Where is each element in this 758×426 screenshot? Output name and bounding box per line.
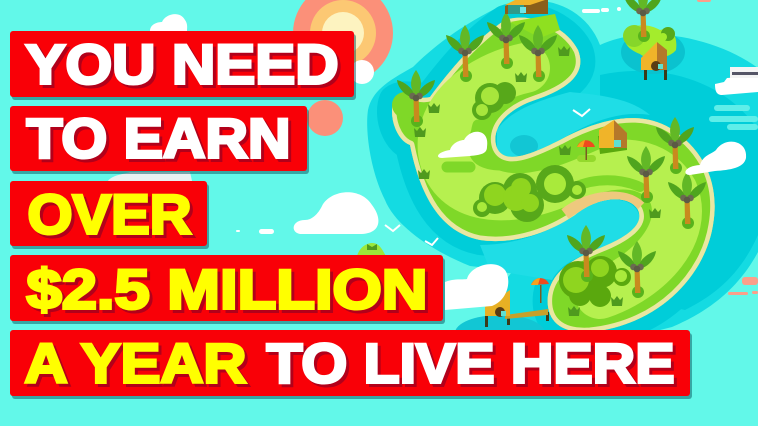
palm trees — [397, 0, 706, 298]
tufts — [414, 46, 661, 316]
bush: lower — [559, 256, 631, 307]
island: upper green band — [575, 180, 640, 187]
sun — [293, 0, 393, 83]
salmon streaks — [697, 0, 758, 295]
bush: large centre — [473, 165, 586, 222]
banner 5: A YEAR TO LIVE HERE: TO LIVE HERE — [270, 334, 678, 398]
top right islet — [621, 25, 685, 74]
hut: centre island — [598, 120, 627, 154]
lower cloud — [445, 264, 508, 310]
island: dark green body — [392, 18, 715, 332]
banner 5: A YEAR TO LIVE HERE — [10, 330, 692, 399]
birds — [385, 109, 590, 245]
banner 3: OVER: OVER — [28, 182, 192, 246]
top headland — [510, 14, 560, 38]
hut: islet — [641, 42, 667, 80]
banner 5: A YEAR TO LIVE HERE: A YEAR — [28, 334, 250, 398]
banner 4: $2.5 MILLION: $2.5 MILLION — [26, 258, 428, 320]
island: light green inner — [443, 68, 677, 294]
clouds over island — [438, 132, 746, 175]
coral circle — [307, 100, 343, 136]
left headland — [392, 92, 418, 118]
island: sand — [392, 18, 715, 332]
island: lower sand strip — [565, 197, 640, 214]
water around island — [367, 0, 758, 345]
lower dock hut — [455, 290, 549, 351]
banner 2: TO EARN: TO EARN — [30, 110, 294, 172]
banner 2: TO EARN: TO EARN — [26, 106, 290, 170]
banner 3: OVER: OVER — [30, 186, 194, 248]
small dashes — [236, 7, 621, 234]
banner 4: $2.5 MILLION: $2.5 MILLION — [30, 260, 430, 324]
banner 1: YOU NEED: YOU NEED — [26, 32, 339, 96]
banner 5: A YEAR TO LIVE HERE: TO LIVE HERE — [266, 332, 674, 394]
lower beach umbrella — [531, 278, 549, 303]
small bush behind banner — [357, 243, 386, 256]
island — [392, 14, 715, 332]
darker water ring — [392, 18, 758, 332]
banner 5: A YEAR TO LIVE HERE: A YEAR — [24, 332, 246, 394]
island: green ridge band — [447, 125, 625, 168]
ship — [715, 67, 758, 95]
hut: top — [505, 0, 548, 14]
bush: upper left — [472, 82, 516, 120]
beach umbrella — [577, 140, 596, 162]
banner 1: YOU NEED: YOU NEED — [28, 36, 342, 98]
lagoons — [480, 92, 650, 280]
sky clouds — [108, 14, 378, 234]
water streaks — [709, 105, 758, 130]
